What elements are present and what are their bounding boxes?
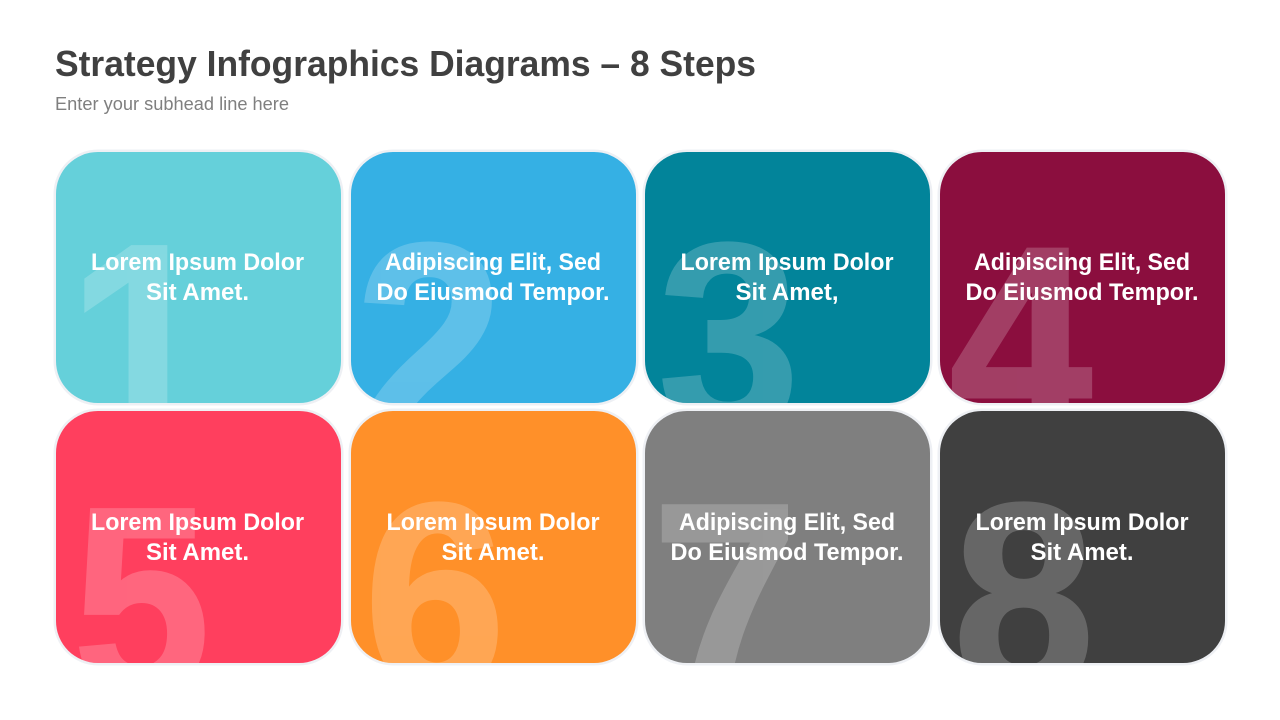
panel: step 3: [645, 152, 930, 403]
step 3 text: Lorem Ipsum Dolor: [680, 249, 894, 276]
panel: step 1: [56, 152, 341, 403]
step 4 text: Adipiscing Elit, Sed: [974, 249, 1190, 276]
step 8 text: Sit Amet.: [1030, 539, 1134, 566]
step 7 text: [670, 509, 904, 566]
step 7 text: Do Eiusmod Tempor.: [670, 539, 904, 566]
step 5 text: Sit Amet.: [146, 539, 249, 566]
step 3 text: [680, 249, 894, 306]
step 2 text: [376, 249, 610, 306]
step 3 text: Sit Amet,: [736, 279, 838, 306]
panel: step 6: [351, 411, 636, 663]
step 8 text: Lorem Ipsum Dolor: [976, 509, 1188, 536]
step 1 text: Sit Amet.: [146, 279, 249, 306]
step 6 text: Sit Amet.: [442, 539, 544, 566]
step 6 text: [386, 509, 600, 566]
panel: step 4: [940, 152, 1225, 403]
step 4 text: [966, 249, 1198, 306]
step 2 text: Do Eiusmod Tempor.: [376, 279, 610, 306]
step 1 text: Lorem Ipsum Dolor: [91, 249, 304, 276]
step 2 text: Adipiscing Elit, Sed: [385, 249, 601, 276]
panel: step 7: [645, 411, 930, 663]
step 8 text: [976, 509, 1188, 566]
title: Strategy Infographics Diagrams – 8 Steps: [55, 43, 756, 84]
panel: step 2: [351, 152, 636, 403]
step 7 text: Adipiscing Elit, Sed: [679, 509, 895, 536]
step 1 text: [91, 249, 304, 306]
panel: step 8: [940, 411, 1225, 663]
panel: step 5: [56, 411, 341, 663]
step 5 text: [91, 509, 304, 566]
subhead: Enter your subhead line here: [55, 93, 289, 114]
step 4 text: Do Eiusmod Tempor.: [966, 279, 1198, 306]
step 5 text: Lorem Ipsum Dolor: [91, 509, 304, 536]
step 6 text: Lorem Ipsum Dolor: [386, 509, 600, 536]
